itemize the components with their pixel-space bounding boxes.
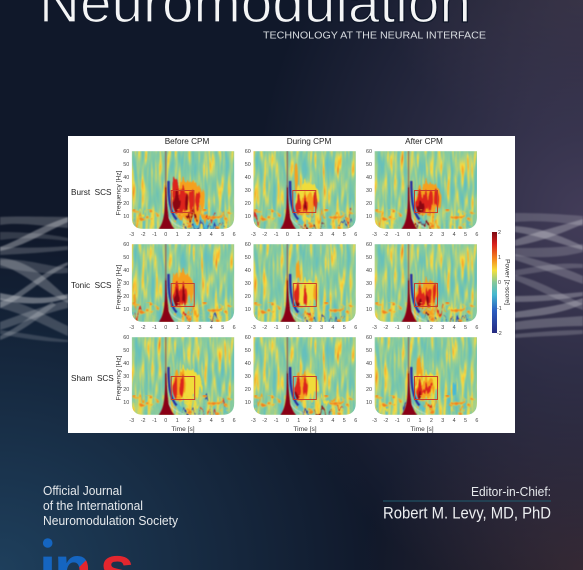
editor-in-chief block: Robert M. Levy, MD, PhD — [383, 504, 551, 522]
axis label: time column 2: Time [s] — [293, 426, 317, 433]
colour bar legend: -2 — [497, 331, 502, 337]
colour bar legend: 0 — [498, 280, 501, 286]
colour bar legend: 2 — [498, 230, 501, 236]
heatmap: sham during — [245, 335, 357, 424]
colour bar legend: 1 — [498, 255, 501, 261]
society affiliation text — [43, 483, 178, 528]
column heading: after: After CPM — [405, 137, 443, 146]
subtitle: TECHNOLOGY AT THE NEURAL INTERFACE — [263, 30, 486, 42]
heatmap: sham before — [123, 335, 236, 424]
heatmap: tonic after — [366, 242, 478, 331]
axis label: frequency row 1: Frequency [Hz] — [116, 170, 122, 215]
editor-in-chief block — [383, 484, 551, 522]
background ribbons: left — [0, 217, 70, 342]
colour bar legend: -1 — [497, 306, 502, 312]
row label: tonic: Tonic SCS — [71, 281, 112, 290]
row label: burst: Burst SCS — [71, 188, 112, 197]
heatmap: sham after — [366, 335, 478, 424]
axis label: time column 1: Time [s] — [171, 426, 195, 433]
society affiliation text: of the International — [43, 498, 143, 513]
background ribbons: right — [515, 213, 583, 338]
heatmap: burst during — [245, 149, 357, 238]
logo: ins — [42, 538, 132, 570]
colour bar legend: Power [z-score] — [504, 259, 510, 305]
heatmap: tonic during — [245, 242, 357, 331]
column heading: during: During CPM — [287, 137, 331, 146]
editor-in-chief block: Editor-in-Chief: — [471, 484, 551, 499]
axis label: frequency row 2: Frequency [Hz] — [116, 264, 122, 309]
society affiliation text: Official Journal — [43, 483, 122, 498]
row label: sham: Sham SCS — [71, 374, 114, 383]
axis label: frequency row 3: Frequency [Hz] — [116, 355, 122, 400]
society affiliation text: Neuromodulation Society — [43, 513, 178, 528]
figure panel — [68, 136, 515, 433]
colour bar legend — [492, 230, 510, 337]
axis label: time column 3: Time [s] — [410, 426, 434, 433]
heatmap: burst before — [123, 149, 236, 238]
heatmap: burst after — [366, 149, 478, 238]
column heading: before: Before CPM — [165, 137, 209, 146]
heatmap: tonic before — [123, 242, 236, 331]
